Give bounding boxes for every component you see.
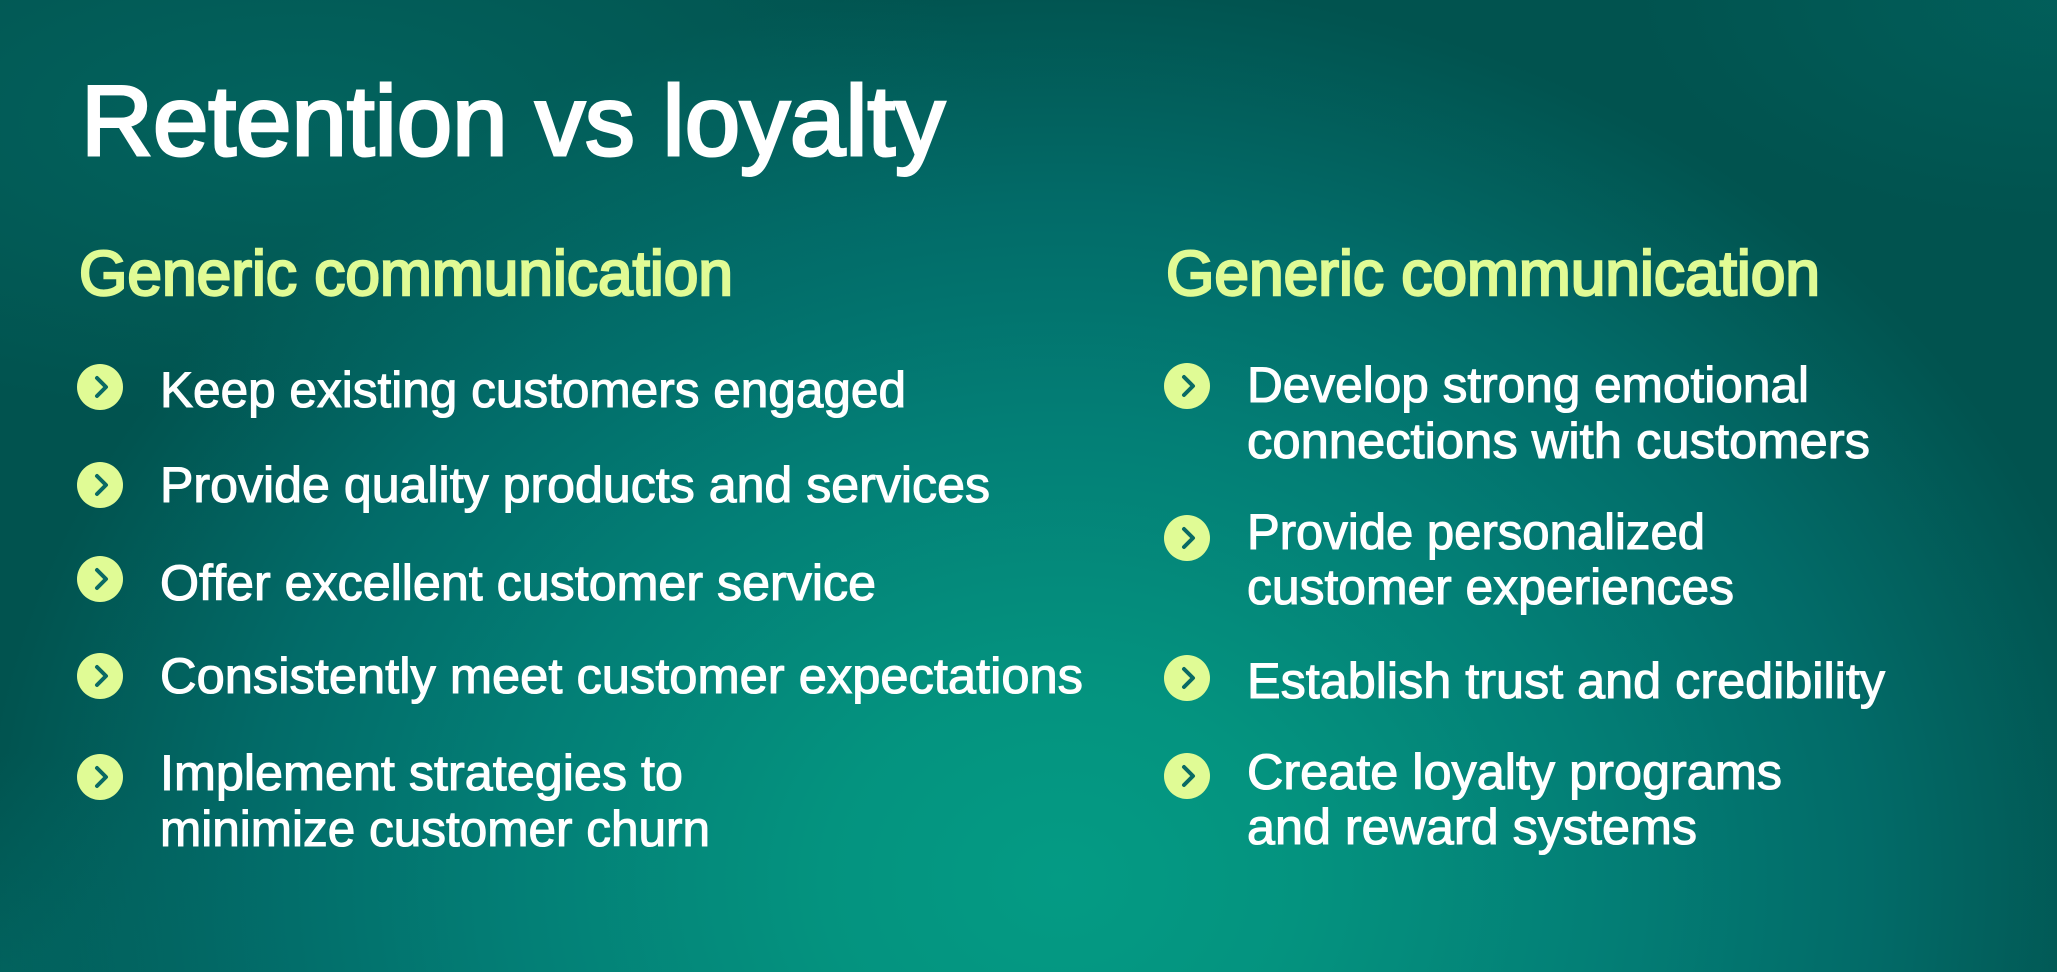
list item: Develop strong emotional connections with customers: Develop strong emotional <box>1247 357 1809 413</box>
list item: Keep existing customers engaged: Keep existing customers engaged <box>160 362 906 418</box>
list item: Offer excellent customer service: Offer excellent customer service <box>160 555 876 611</box>
list item: Provide quality products and services: Provide quality products and services <box>160 457 990 513</box>
list item: Consistently meet customer expectations: Consistently meet customer expectations <box>160 648 1083 704</box>
list item: Implement strategies to minimize customer churn <box>77 745 710 857</box>
list item: Provide personalized customer experiences <box>1164 504 1734 615</box>
panel: left column <box>77 239 1083 857</box>
list item: Establish trust and credibility: Establish trust and credibility <box>1247 653 1885 709</box>
list item: Create loyalty programs and reward systems <box>1164 744 1782 855</box>
list item: Provide personalized customer experiences: customer experiences <box>1247 559 1734 615</box>
list item: Implement strategies to minimize customer churn: Implement strategies to <box>160 745 683 801</box>
heading: right: Generic communication <box>1166 239 1820 309</box>
list item: Develop strong emotional connections with customers: connections with customers <box>1247 413 1870 469</box>
list item: Develop strong emotional connections with customers <box>1164 357 1870 469</box>
title: Retention vs loyalty <box>81 65 946 176</box>
panel: right column <box>1164 239 1885 855</box>
list item: Create loyalty programs and reward systems: and reward systems <box>1247 799 1697 855</box>
heading: left: Generic communication <box>79 239 733 309</box>
list item: Provide personalized customer experiences: Provide personalized <box>1247 504 1705 560</box>
list item: Create loyalty programs and reward systems: Create loyalty programs <box>1247 744 1782 800</box>
list item: Implement strategies to minimize customer churn: minimize customer churn <box>160 801 710 857</box>
